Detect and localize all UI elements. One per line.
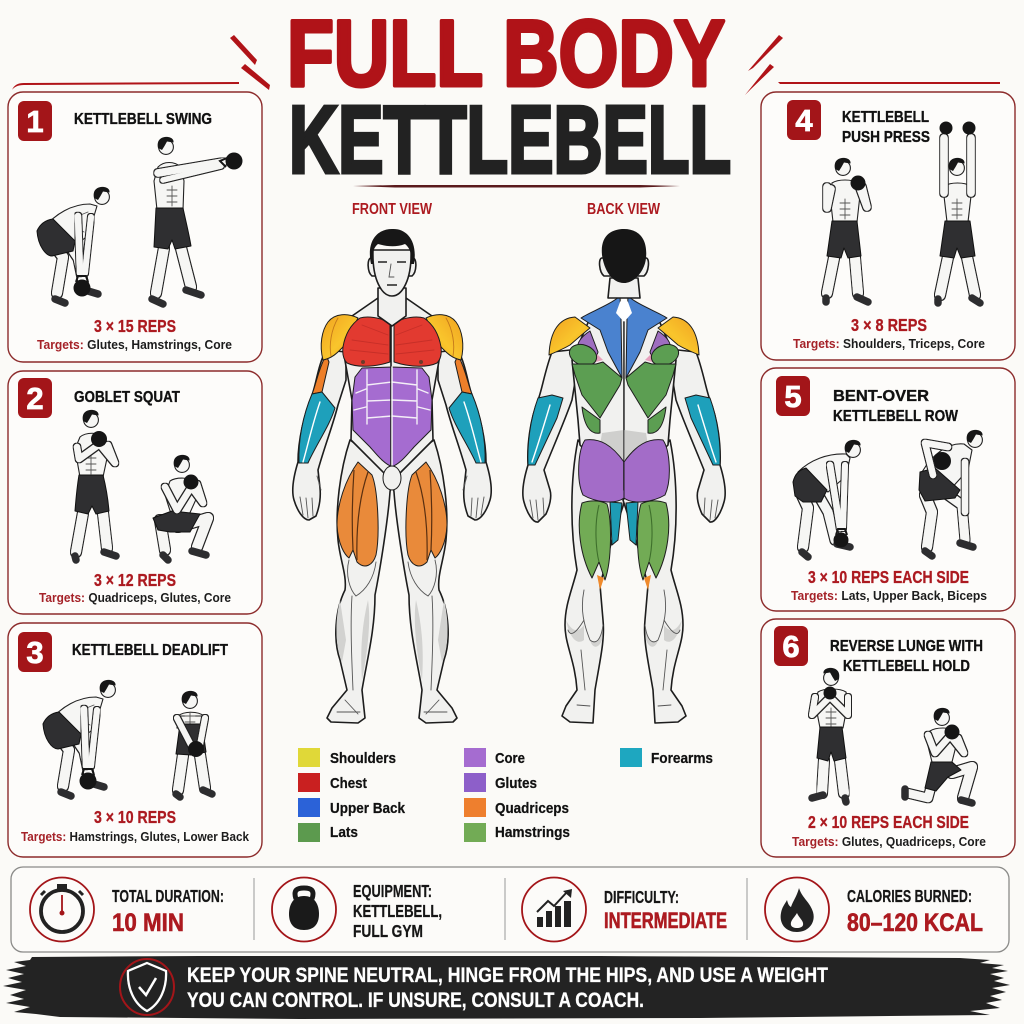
reps: 3 × 8 REPS (851, 315, 927, 335)
legend item: lats: Lats (330, 824, 358, 841)
badge 4 (787, 100, 821, 140)
legend item: forearms (620, 748, 713, 767)
heading: front view: FRONT VIEW (352, 201, 432, 218)
head back (600, 229, 648, 322)
badge 1 (18, 101, 52, 141)
reps: 3 × 12 REPS (94, 570, 176, 590)
brush stroke background (3, 956, 1010, 1019)
stat: equipment: KETTLEBELL, (353, 901, 442, 921)
legend item: glutes (464, 773, 537, 792)
targets: Targets: Lats, Upper Back, Biceps (791, 588, 987, 603)
anatomy figure: front (293, 229, 491, 723)
exercise title (842, 109, 930, 146)
figure: lunge start (812, 668, 848, 802)
figure: press rack position (826, 158, 868, 302)
icon: shield (120, 959, 174, 1015)
safety text: KEEP YOUR SPINE NEUTRAL, HINGE FROM THE HIPS, AND USE A WEIGHT (187, 964, 828, 987)
badge 3: 3 (26, 635, 44, 670)
legend item: quadriceps (464, 798, 569, 817)
legend item: chest (298, 773, 367, 792)
title: KETTLEBELL (289, 86, 731, 194)
heading: back view: BACK VIEW (587, 201, 660, 218)
stat: equipment: FULL GYM (353, 921, 423, 941)
icon: stopwatch (41, 884, 83, 932)
panel: exercise 4 push press (761, 92, 1015, 360)
stat: calories burned: 80–120 KCAL (847, 909, 983, 937)
figure: press overhead (938, 122, 980, 303)
exercise title: KETTLEBELL DEADLIFT (72, 642, 228, 659)
icon: flame (781, 888, 814, 932)
panel: exercise 1 kettlebell swing (8, 92, 262, 362)
icon: kettlebell (289, 888, 319, 930)
badge 2 (18, 378, 52, 418)
badge 6 (774, 626, 808, 666)
stats panel (11, 867, 1009, 952)
reps: 2 × 10 REPS EACH SIDE (808, 812, 969, 832)
figure: deadlift top (176, 691, 212, 797)
exercise title: KETTLEBELL ROW (833, 408, 959, 425)
legend item: hamstrings: Hamstrings (495, 824, 570, 841)
badge 2: 2 (26, 381, 44, 416)
exercise title: REVERSE LUNGE WITH (830, 638, 983, 655)
stat: equipment: EQUIPMENT: (353, 881, 432, 901)
figure: row start (793, 440, 861, 557)
badge 4: 4 (795, 103, 813, 138)
stat: equipment (272, 878, 442, 942)
exercise title: KETTLEBELL HOLD (843, 658, 970, 675)
exercise title (830, 638, 983, 675)
panel: exercise 6 reverse lunge (761, 619, 1015, 857)
figure: swing bottom position (37, 187, 110, 303)
stat: difficulty: INTERMEDIATE (604, 908, 727, 933)
exercise title: GOBLET SQUAT (74, 389, 180, 406)
figure: swing top position (152, 137, 242, 304)
title accent slashes (12, 35, 1000, 188)
title: FULL BODY (287, 0, 725, 106)
targets: Targets: Shoulders, Triceps, Core (793, 336, 985, 351)
exercise title: KETTLEBELL (842, 109, 929, 126)
stat: total duration: TOTAL DURATION: (112, 886, 224, 906)
legend item: shoulders: Shoulders (330, 750, 396, 767)
badge 1: 1 (26, 104, 44, 139)
legend item: core: Core (495, 750, 525, 767)
targets: Targets: Glutes, Hamstrings, Core (37, 337, 232, 352)
legend item: chest: Chest (330, 775, 367, 792)
legend item: core (464, 748, 525, 767)
legend item: lats (298, 823, 358, 842)
exercise title: BENT-OVER (833, 388, 929, 405)
stat: calories burned (765, 878, 983, 942)
legend item: hamstrings (464, 823, 570, 842)
legend item: forearms: Forearms (651, 750, 713, 767)
badge 3 (18, 632, 52, 672)
stat: total duration (30, 878, 224, 942)
figure: row top (919, 430, 983, 556)
legend item: glutes: Glutes (495, 775, 537, 792)
legend item: upper back: Upper Back (330, 800, 406, 817)
panel: exercise 5 bent-over row (761, 368, 1015, 611)
stat: difficulty (522, 878, 727, 942)
anatomy figure: back (523, 229, 725, 723)
legend item: shoulders (298, 748, 396, 767)
legend item: upper back (298, 798, 406, 817)
badge 5 (776, 376, 810, 416)
legend (298, 748, 713, 842)
figure: deadlift bottom (43, 680, 116, 796)
figure: lunge down (905, 708, 972, 803)
title (287, 0, 731, 194)
exercise title: PUSH PRESS (842, 129, 930, 146)
safety text: YOU CAN CONTROL. IF UNSURE, CONSULT A COACH. (187, 989, 644, 1012)
panel: exercise 3 kettlebell deadlift (8, 623, 262, 857)
figure: goblet squat (153, 455, 208, 560)
figure: goblet standing (75, 410, 116, 560)
stat: total duration: 10 MIN (112, 909, 184, 937)
targets: Targets: Quadriceps, Glutes, Core (39, 590, 231, 605)
exercise title (833, 388, 959, 425)
panel: exercise 2 goblet squat (8, 371, 262, 614)
head front (368, 229, 416, 326)
exercise title: KETTLEBELL SWING (74, 111, 212, 128)
stat: calories burned: CALORIES BURNED: (847, 886, 972, 906)
targets: Targets: Hamstrings, Glutes, Lower Back (21, 829, 250, 844)
badge 5: 5 (784, 379, 802, 414)
reps: 3 × 10 REPS (94, 807, 176, 827)
stat: difficulty: DIFFICULTY: (604, 887, 679, 907)
safety text (187, 964, 828, 1012)
reps: 3 × 15 REPS (94, 316, 176, 336)
safety banner (3, 956, 1010, 1019)
reps: 3 × 10 REPS EACH SIDE (808, 567, 969, 587)
legend item: quadriceps: Quadriceps (495, 800, 569, 817)
icon: rising bar chart (537, 889, 572, 927)
badge 6: 6 (782, 629, 800, 664)
targets: Targets: Glutes, Quadriceps, Core (792, 834, 986, 849)
